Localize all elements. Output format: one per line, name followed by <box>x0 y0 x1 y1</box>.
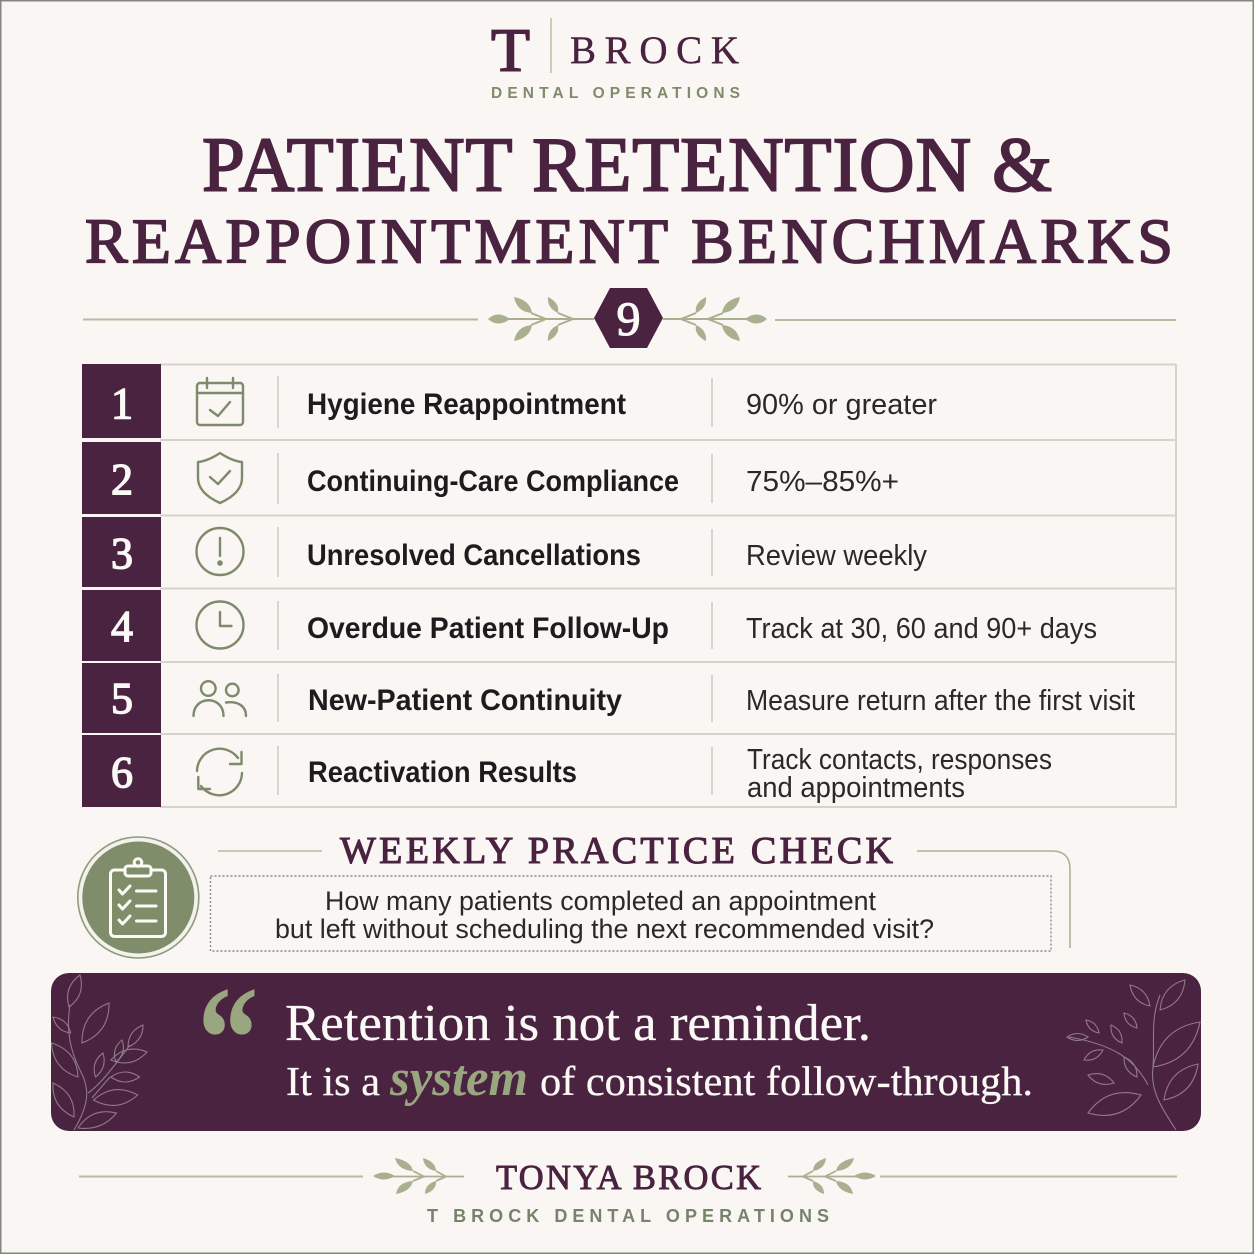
row 6: reactivation results: and appointments <box>747 772 965 804</box>
row 1: hygiene reappointment: Hygiene Reappointment <box>307 388 626 421</box>
foliage left <box>52 975 147 1130</box>
row 2: continuing-care compliance: 75%–85%+ <box>746 466 899 498</box>
row 5: new-patient continuity: Measure return after the first visit <box>746 685 1135 717</box>
row 1: hygiene reappointment <box>82 364 937 438</box>
row 5: new-patient continuity <box>82 663 1135 733</box>
title: REAPPOINTMENT BENCHMARKS <box>85 206 1173 276</box>
row 3: unresolved cancellations: Unresolved Cancellations <box>307 539 641 572</box>
row 4: overdue patient follow-up: Overdue Patient Follow-Up <box>307 612 669 645</box>
row 6: reactivation results <box>82 735 1052 807</box>
logo: T Brock Dental Operations: T <box>491 18 530 84</box>
quote text: of consistent follow-through. <box>540 1058 1033 1104</box>
title divider with sprigs and hexagon badge <box>83 288 1176 348</box>
row 2: continuing-care compliance: Continuing-Care Compliance <box>307 465 679 498</box>
benchmark table <box>82 364 1176 808</box>
row 5: new-patient continuity: New-Patient Continuity <box>308 684 622 717</box>
row 4: overdue patient follow-up: Track at 30, 60 and 90+ days <box>746 613 1097 645</box>
quote text <box>285 995 1033 1107</box>
weekly practice check: but left without scheduling the next recommended visit? <box>275 914 934 944</box>
weekly practice check: WEEKLY PRACTICE CHECK <box>340 830 894 872</box>
row 6: reactivation results: Reactivation Results <box>308 756 577 789</box>
footer: TONYA BROCK <box>496 1159 761 1197</box>
weekly practice check <box>210 830 1070 951</box>
quote text: Retention is not a reminder. <box>285 995 871 1052</box>
quote banner <box>51 956 1201 1131</box>
row 6: reactivation results: 6 <box>111 748 133 797</box>
weekly practice check: How many patients completed an appointment <box>325 886 877 916</box>
quote text: It is a <box>286 1058 380 1104</box>
row 1: hygiene reappointment: 1 <box>111 379 133 428</box>
row 6: reactivation results: Track contacts, responses <box>747 744 1052 776</box>
title <box>85 122 1173 276</box>
logo: T Brock Dental Operations <box>491 18 740 102</box>
row 5: new-patient continuity: 5 <box>111 674 133 723</box>
row 4: overdue patient follow-up: 4 <box>111 602 133 651</box>
row 1: hygiene reappointment: 90% or greater <box>746 389 937 421</box>
logo: T Brock Dental Operations: DENTAL OPERATIONS <box>491 85 740 102</box>
footer: T BROCK DENTAL OPERATIONS <box>427 1206 829 1226</box>
row 2: continuing-care compliance: 2 <box>111 455 133 504</box>
quote mark: “ <box>198 956 258 1122</box>
row 3: unresolved cancellations: Review weekly <box>746 540 927 572</box>
title divider with sprigs and hexagon badge: 9 <box>616 293 640 346</box>
row 3: unresolved cancellations: 3 <box>111 529 133 578</box>
title: PATIENT RETENTION & <box>202 122 1052 208</box>
foliage right <box>1067 980 1200 1130</box>
row 3: unresolved cancellations <box>82 517 927 587</box>
row 2: continuing-care compliance <box>82 442 899 514</box>
footer <box>79 1158 1177 1226</box>
row 4: overdue patient follow-up <box>82 590 1097 661</box>
icon: clipboard badge <box>78 837 199 958</box>
quote text: system <box>389 1050 528 1107</box>
logo: T Brock Dental Operations: BROCK <box>570 29 739 72</box>
